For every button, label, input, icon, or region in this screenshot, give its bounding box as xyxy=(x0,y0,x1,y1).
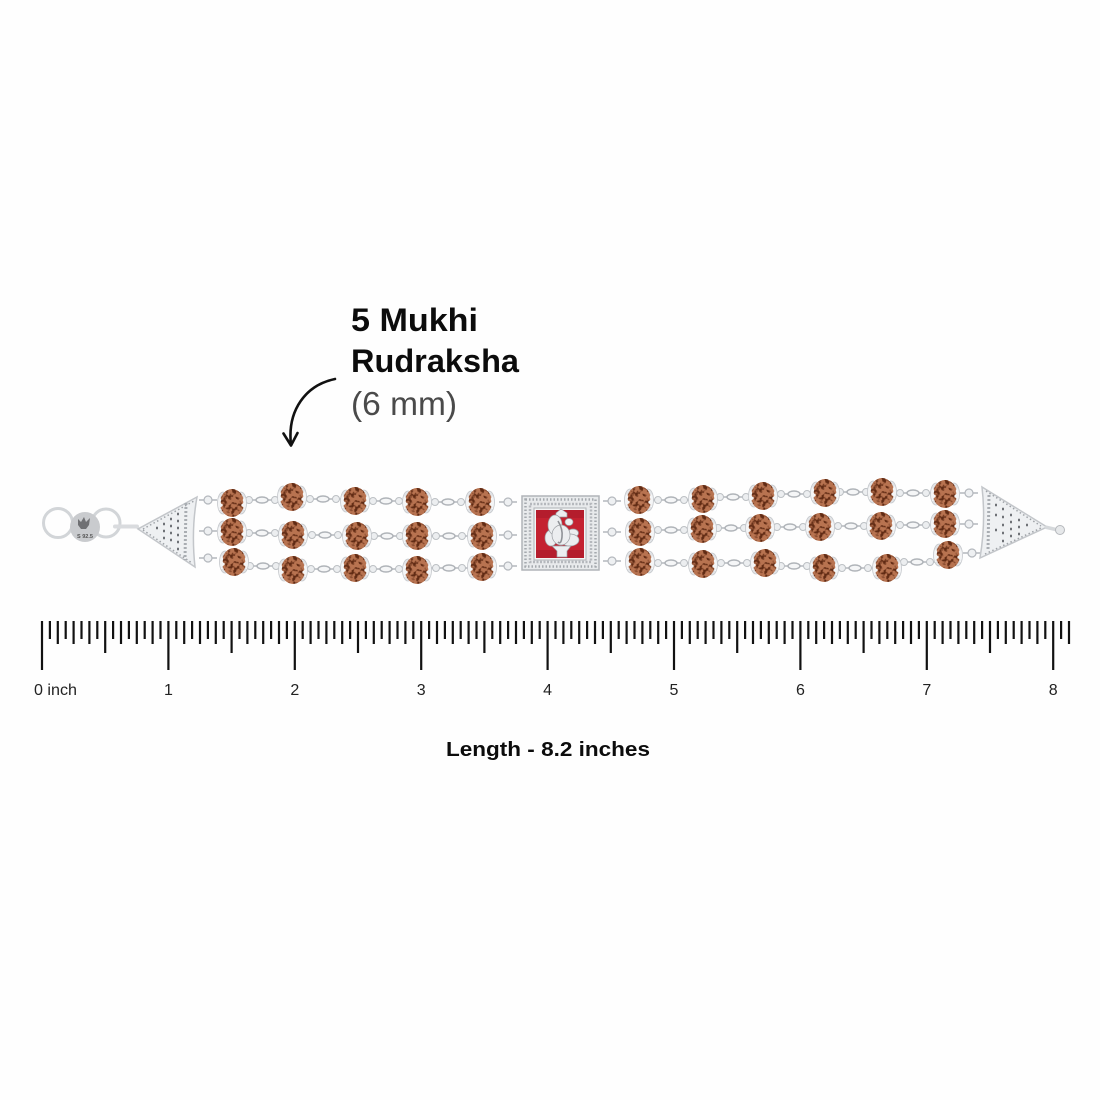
central Ganesh pendant xyxy=(522,496,599,570)
ruler xyxy=(42,621,1069,670)
ruler inch labels: 6 xyxy=(796,682,805,699)
Ganesh figure xyxy=(545,509,579,557)
ruler inch labels: 5 xyxy=(670,682,679,699)
clasp with hallmark disc xyxy=(44,508,139,542)
ruler inch labels: 3 xyxy=(417,682,426,699)
rudraksha beads: bottom row xyxy=(220,541,962,584)
ruler inch labels: 2 xyxy=(290,682,299,699)
chain links xyxy=(199,488,981,572)
callout heading: 5 Mukhi Rudraksha (6 mm): 5 Mukhi xyxy=(351,302,478,338)
length caption: Length - 8.2 inches xyxy=(446,739,650,761)
ruler inch labels: 4 xyxy=(543,682,552,699)
bracelet xyxy=(44,478,1064,584)
ruler inch labels xyxy=(34,682,1058,699)
left triangular end cap xyxy=(138,497,197,567)
rudraksha beads: middle row xyxy=(218,510,960,550)
ruler inch labels: 7 xyxy=(922,682,931,699)
ruler inch labels: 0 inch xyxy=(34,682,77,699)
callout heading: 5 Mukhi Rudraksha (6 mm): Rudraksha xyxy=(351,343,519,379)
clasp with hallmark disc: S 92.5 xyxy=(77,534,93,540)
arrow pointing to the rudraksha bead xyxy=(284,379,335,446)
ruler inch labels: 8 xyxy=(1049,682,1058,699)
callout heading: 5 Mukhi Rudraksha (6 mm) xyxy=(351,302,519,422)
ruler inch labels: 1 xyxy=(164,682,173,699)
ruler tick marks xyxy=(42,621,1069,670)
right triangular end cap xyxy=(980,487,1064,558)
callout heading: 5 Mukhi Rudraksha (6 mm): (6 mm) xyxy=(351,385,457,422)
rudraksha beads: top row xyxy=(218,478,960,517)
